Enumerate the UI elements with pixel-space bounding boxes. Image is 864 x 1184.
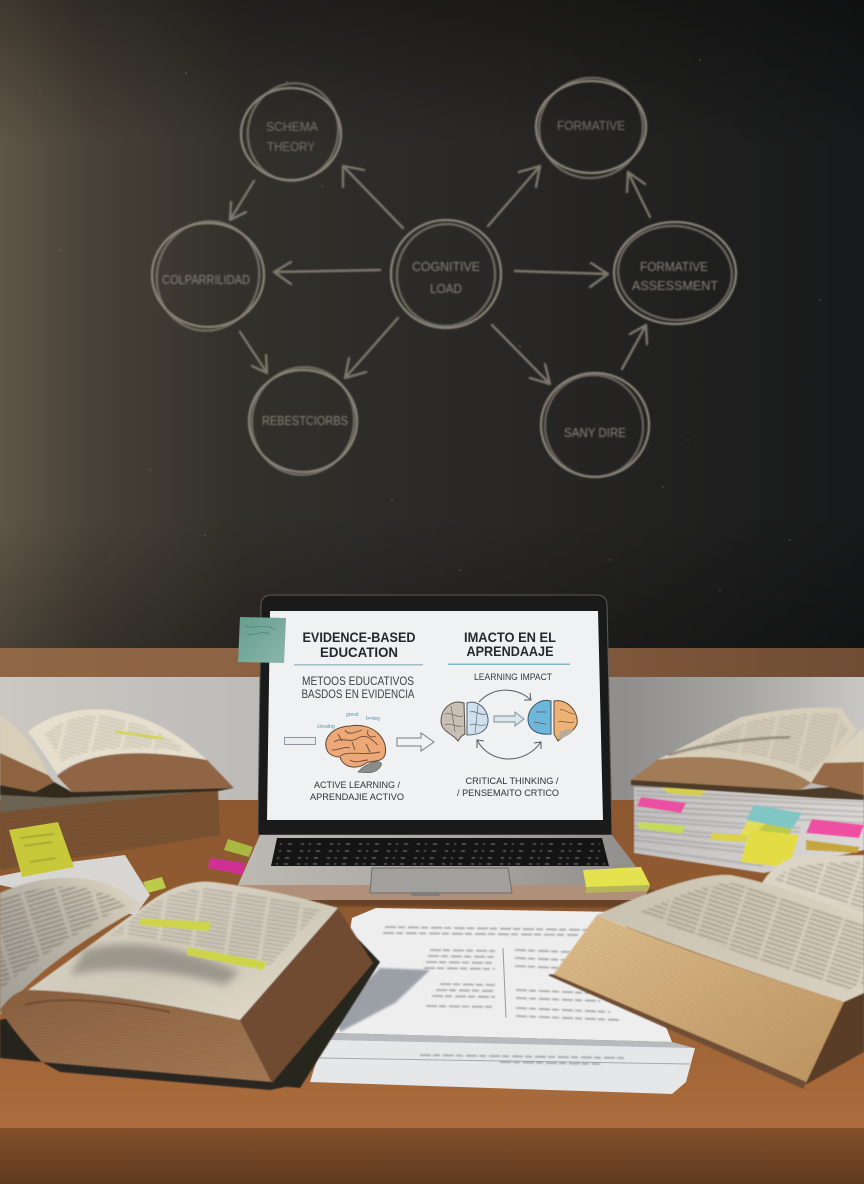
subtitle: learning impact: LEARNING IMPACT bbox=[474, 672, 552, 683]
highlight strips bbox=[140, 918, 267, 970]
papers, front centre bbox=[310, 908, 695, 1094]
node: schema theory bbox=[237, 74, 349, 190]
icon: orange brain bbox=[326, 725, 386, 773]
node: sany dire bbox=[537, 367, 651, 485]
page edge left bbox=[0, 753, 54, 792]
page shadow bbox=[70, 944, 240, 985]
page edge right bbox=[57, 753, 234, 792]
concept map drawn in chalk bbox=[144, 68, 737, 485]
icon: blue and orange brain bbox=[528, 700, 577, 741]
node: schema theory: SCHEMA bbox=[266, 119, 318, 134]
back page bbox=[762, 855, 864, 920]
paper text lines bbox=[383, 927, 625, 1064]
subtitle: metodos educativos: BASDOS EN EVIDENCIA bbox=[302, 689, 415, 701]
node: sany dire: SANY DIRE bbox=[564, 425, 626, 440]
open book, front right bbox=[549, 855, 864, 1088]
laptop screen bezel bbox=[258, 595, 612, 835]
sticky note: yellow on laptop bbox=[583, 867, 650, 893]
page edge bbox=[631, 757, 811, 791]
heading: evidence-based education bbox=[302, 629, 416, 660]
desk surface bbox=[0, 800, 864, 1130]
laptop base bbox=[238, 835, 650, 885]
cover bbox=[0, 920, 380, 1088]
right page bbox=[824, 728, 864, 763]
highlight bbox=[115, 730, 163, 740]
icon: small concept doodles above brain: b=deg bbox=[366, 716, 380, 722]
page block bbox=[553, 915, 844, 1085]
node: cognitive load: COGNITIVE bbox=[412, 259, 480, 274]
node: cognitive load: LOAD bbox=[430, 281, 462, 296]
wooden chalk ledge bbox=[0, 648, 864, 677]
desk front edge bbox=[0, 1128, 864, 1184]
laptop screen panel bbox=[267, 611, 603, 820]
sticky tab: green bbox=[224, 839, 253, 857]
arrow: curved top bbox=[479, 690, 531, 702]
sticky note: yellow on book bbox=[9, 822, 74, 877]
node: colparrilidad: COLPARRILIDAD bbox=[162, 273, 250, 287]
page text texture bbox=[640, 883, 864, 990]
right page bbox=[28, 882, 338, 1020]
laptop shadow on desk bbox=[240, 890, 680, 908]
icon: small concept doodles above brain: cheatng bbox=[317, 724, 335, 730]
caption: critical thinking: CRITICAL THINKING / bbox=[466, 776, 559, 787]
caption: active learning: ACTIVE LEARNING / bbox=[314, 780, 400, 791]
main page bbox=[597, 875, 864, 1002]
icon: grey and blue brain bbox=[441, 702, 488, 741]
node: schema theory: THEORY bbox=[267, 139, 315, 154]
caption: critical thinking: / PENSEMAITO CRTICO bbox=[457, 788, 559, 799]
trackpad bbox=[370, 868, 512, 893]
icon: small concept doodles above brain: gresd bbox=[346, 712, 359, 718]
stack of books, upper left bbox=[0, 709, 234, 870]
sticky note: teal on laptop bbox=[238, 617, 286, 663]
dark side bbox=[805, 993, 864, 1085]
laptop bbox=[238, 595, 650, 900]
node: rebestciorbs bbox=[242, 358, 364, 484]
subtitle: metodos educativos bbox=[302, 676, 415, 701]
chalkboard background bbox=[0, 0, 864, 650]
input box bbox=[284, 738, 316, 744]
caption: critical thinking bbox=[457, 776, 559, 799]
node: formative assessment: FORMATIVE bbox=[640, 259, 708, 274]
cover edge bbox=[549, 975, 805, 1088]
node: rebestciorbs: REBESTCIORBS bbox=[262, 414, 348, 428]
node: cognitive load bbox=[389, 216, 503, 334]
subtitle: metodos educativos: METOOS EDUCATIVOS bbox=[302, 676, 414, 688]
main sheet bbox=[333, 908, 672, 1042]
heading: impacto en el aprendaaje bbox=[464, 629, 556, 659]
heading: evidence-based education: EVIDENCE-BASED bbox=[302, 629, 416, 645]
stack of papers, upper right bbox=[634, 787, 864, 873]
open book, front left bbox=[0, 878, 380, 1090]
shadow on paper bbox=[336, 968, 430, 1032]
icon: small concept doodles above brain bbox=[317, 712, 380, 730]
sticky tabs on the stack bbox=[637, 787, 864, 867]
heading: impacto en el aprendaaje: IMACTO EN EL bbox=[464, 629, 556, 645]
arrow: middle light blue bbox=[494, 712, 524, 726]
page edge side bbox=[240, 908, 373, 1083]
heading: evidence-based education: EDUCATION bbox=[320, 644, 398, 660]
node: formative: FORMATIVE bbox=[557, 118, 625, 133]
node: formative assessment bbox=[613, 220, 737, 326]
page edge front bbox=[0, 990, 272, 1082]
arrow: curved bottom bbox=[477, 740, 541, 759]
arrow: brain to split brain bbox=[397, 733, 434, 751]
heading rules bbox=[294, 664, 570, 666]
heading: impacto en el aprendaaje: APRENDAAJE bbox=[466, 643, 554, 659]
page text texture bbox=[110, 888, 320, 965]
lower sheets bbox=[310, 1033, 695, 1094]
wall bbox=[0, 677, 864, 802]
node: formative bbox=[530, 68, 652, 188]
left page bbox=[657, 707, 857, 783]
sticky tab: magenta bbox=[208, 858, 245, 875]
arrows between nodes bbox=[230, 166, 650, 384]
sticky tab: small green bbox=[143, 877, 166, 893]
node: formative assessment: ASSESSMENT bbox=[632, 279, 718, 293]
open book, upper right bbox=[631, 707, 864, 800]
node: colparrilidad bbox=[144, 209, 272, 343]
left page bbox=[0, 878, 143, 1015]
thick closed book bbox=[0, 790, 220, 870]
column rule bbox=[503, 948, 506, 1018]
open book left page bbox=[0, 715, 48, 775]
keyboard bbox=[271, 838, 609, 866]
caption: active learning: APRENDAJIE ACTIVO bbox=[310, 792, 404, 803]
small paper behind front book bbox=[0, 855, 150, 915]
open book right page bbox=[28, 709, 207, 774]
caption: active learning bbox=[310, 780, 404, 803]
